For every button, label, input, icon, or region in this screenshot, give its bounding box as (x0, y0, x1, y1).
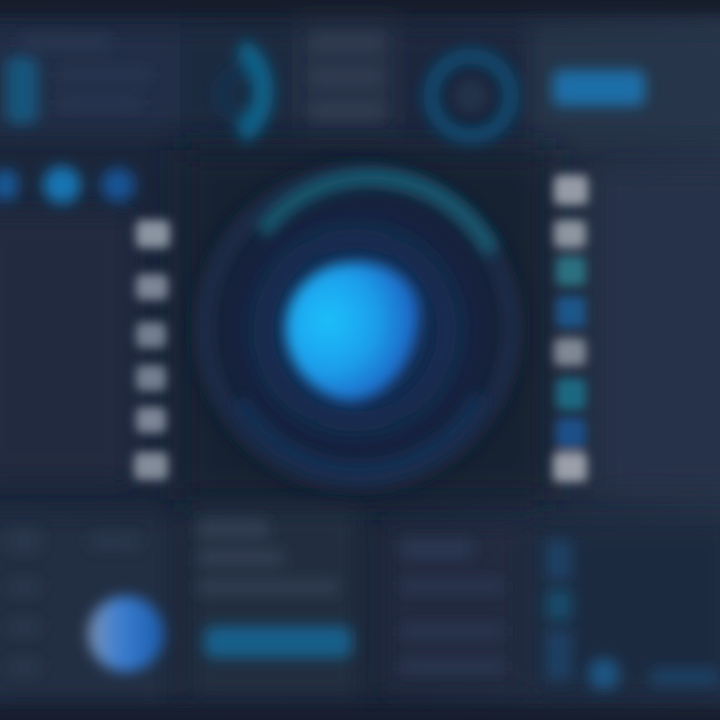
chart: bottom-right bar (650, 668, 720, 686)
text block: top-left blur (20, 36, 150, 108)
icon: bottom-right dot (588, 658, 620, 690)
panel: bottom row (0, 510, 720, 705)
dial disc (198, 168, 518, 488)
icon row: blue dots (0, 166, 135, 204)
panel: centre shadow (180, 150, 550, 500)
top edge band (0, 0, 720, 16)
chart: bottom-right column bars (546, 540, 572, 680)
text block: bottom-left blur (8, 530, 140, 674)
panel: left column (0, 215, 130, 480)
dial lower ring (240, 395, 480, 470)
dial outer ring (205, 175, 511, 481)
text block: bottom-centre blur (198, 520, 338, 594)
button: top-right pill (553, 70, 645, 106)
list: right markers (553, 175, 588, 482)
text block: top-centre blur (312, 36, 382, 118)
chart: donut ring (431, 56, 511, 136)
chart: central dial (198, 168, 518, 488)
text block: bottom-right blur (402, 540, 502, 672)
chart: half ring (222, 48, 266, 134)
panel: top row (0, 22, 720, 148)
chart: donut centre (455, 80, 487, 112)
button: bottom teal pill (204, 626, 352, 658)
dial inner ring (263, 238, 447, 422)
list: left grey markers (134, 220, 170, 480)
glowing core (285, 262, 420, 402)
panel: right column (600, 170, 720, 490)
icon: blue ball (88, 596, 164, 672)
bottom edge band (0, 706, 720, 720)
dial teal arc (262, 178, 492, 252)
icon: left gauge bar (6, 56, 38, 124)
